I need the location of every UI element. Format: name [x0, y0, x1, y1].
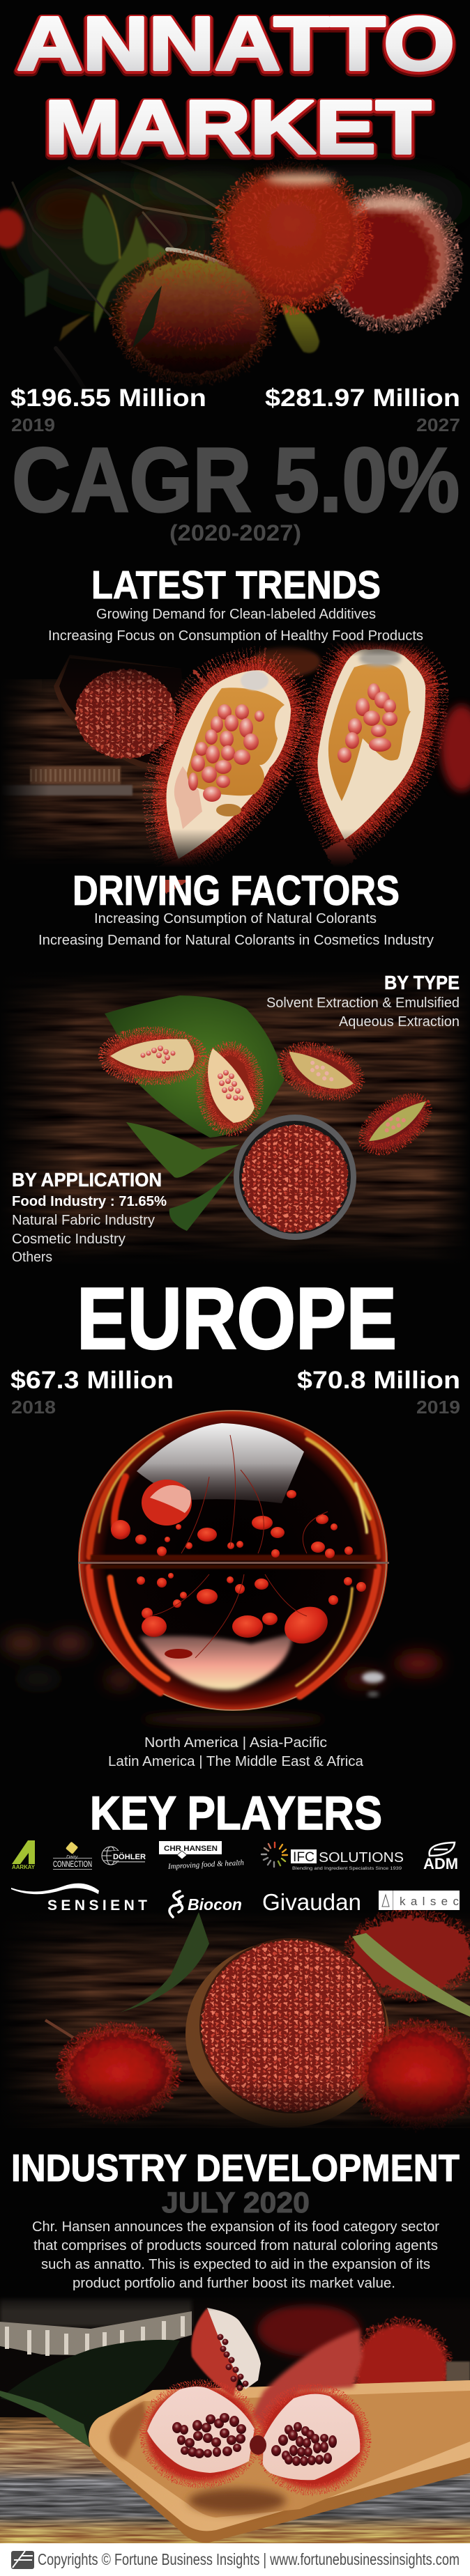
heading: driving factors: DRIVING FACTORS	[73, 867, 400, 914]
heading: latest trends: LATEST TRENDS	[91, 563, 381, 607]
photo: opened annatto pods	[0, 620, 470, 880]
pod c	[278, 1039, 364, 1103]
text: development description: Chr. Hansen announces the expansion of its food category sector	[32, 2219, 439, 2235]
large green leaf	[105, 995, 285, 1138]
europe stats: $70.8 Million	[297, 1367, 460, 1394]
dark backdrop	[0, 2297, 470, 2423]
pod left spikes	[167, 670, 291, 859]
europe stats: 2019	[416, 1397, 460, 1418]
pod right open	[259, 2389, 365, 2490]
logo: biocon	[169, 1891, 242, 1917]
text: by application: Others	[12, 1250, 52, 1265]
pod left	[167, 670, 291, 859]
branches	[13, 162, 227, 390]
seeds	[338, 683, 397, 763]
text: by application: Natural Fabric Industry	[12, 1213, 155, 1228]
lower glow	[139, 1634, 293, 1690]
logo: chr hansen: CHR HANSEN	[164, 1845, 218, 1853]
right fruit	[360, 2026, 470, 2123]
red fruit at right edge	[441, 705, 470, 791]
logo: ifc solutions: SOLUTIONS	[319, 1850, 404, 1865]
title line: annatto: ANNATTO	[17, 2, 455, 87]
logo: dohler: DÖHLER	[113, 1852, 146, 1861]
reflection on surface	[142, 1713, 324, 1725]
green stem	[352, 1933, 470, 2017]
stem center	[250, 2435, 266, 2455]
left fruit	[45, 2020, 174, 2116]
logo: aarkay	[12, 1840, 36, 1870]
glass ring highlights	[89, 1434, 378, 1696]
europe stats: $67.3 Million	[10, 1367, 174, 1394]
pod right	[317, 649, 425, 839]
wooden background	[0, 1912, 470, 2128]
bowl of seeds	[42, 644, 321, 773]
text: development description	[32, 2219, 439, 2291]
logo: kalsec: kalsec	[400, 1895, 459, 1908]
logo: adm	[423, 1842, 458, 1872]
icon: fortune business insights logo	[11, 2551, 34, 2569]
text: driving factors list: Increasing Consumption of Natural Colorants	[94, 911, 377, 926]
logo: dairy connection: CONNECTION	[53, 1859, 92, 1869]
footer	[0, 2543, 470, 2576]
title line: annatto: ANNATTO	[17, 1, 455, 86]
fade bottom	[0, 2079, 470, 2139]
logo: ifc solutions: IFC	[293, 1850, 314, 1865]
text: development description: product portfolio and further boost its market value.	[73, 2276, 395, 2291]
seeds in bowl	[202, 1940, 384, 2111]
stat: 2027 value: $281.97 Million	[265, 385, 460, 412]
photo: pods on leaves with bowl of seeds	[0, 972, 470, 1264]
pod b	[204, 1048, 257, 1129]
logos: key players	[11, 1840, 460, 1917]
pod d	[356, 1087, 438, 1161]
text: development description: such as annatto. This is expected to aid in the expansion of its	[41, 2257, 430, 2272]
fade top and bottom	[0, 620, 470, 641]
europe stats	[10, 1367, 460, 1418]
top right fruit	[349, 1914, 470, 1994]
seeds	[218, 2334, 248, 2391]
wooden bowl	[185, 1941, 389, 2127]
text: development description: that comprises of products sourced from natural coloring agents	[33, 2238, 438, 2253]
leaves	[24, 192, 319, 353]
text: other regions: Latin America | The Middle East & Africa	[108, 1754, 364, 1769]
woven basket	[0, 2299, 192, 2356]
heading: europe: EUROPE	[77, 1271, 397, 1367]
europe stats: 2018	[11, 1397, 56, 1418]
title line: annatto: ANNATTO	[17, 3, 455, 88]
seeds	[188, 704, 264, 802]
cagr period: (2020-2027)	[169, 520, 301, 545]
text: latest trends list	[48, 607, 423, 644]
text: driving factors list	[38, 911, 434, 948]
wooden table	[0, 669, 195, 864]
text: other regions	[108, 1735, 364, 1769]
dark leaf	[0, 2340, 180, 2447]
red flap behind	[252, 2329, 363, 2429]
text: by type: Aqueous Extraction	[339, 1014, 460, 1030]
photo: seed bowl and fruits	[0, 1912, 470, 2152]
center divider	[78, 1562, 389, 1564]
logo: dairy connection	[53, 1842, 92, 1870]
weathered table	[0, 2417, 470, 2543]
pod left open	[145, 2385, 257, 2483]
red bubbles	[111, 1490, 366, 1650]
photo: opened pods on wooden tray	[0, 2292, 470, 2543]
illustration: red glass sphere	[3, 1410, 441, 1725]
logo: dairy connection: Dairy	[66, 1855, 78, 1860]
wooden background	[0, 972, 470, 1264]
logo: adm: ADM	[423, 1855, 458, 1872]
pod a	[105, 1034, 200, 1078]
logo: givaudan: Givaudan	[262, 1889, 361, 1915]
logo: biocon: Biocon	[188, 1895, 242, 1914]
sphere body	[78, 1410, 388, 1711]
title line: market: MARKET	[45, 85, 431, 170]
top dome highlight	[137, 1423, 304, 1503]
fruit: right	[326, 195, 455, 323]
logo: chr hansen	[159, 1841, 245, 1871]
logo: ifc solutions: Blending and Ingredient Specialists Since 1939	[292, 1866, 402, 1871]
title line: market: MARKET	[45, 86, 431, 171]
text: by application	[12, 1169, 167, 1265]
logo: ifc solutions	[261, 1842, 404, 1871]
photo: annatto fruit on branch	[0, 159, 470, 421]
text: other regions: North America | Asia-Pacific	[144, 1735, 327, 1751]
logo: sensient	[11, 1884, 147, 1914]
bowl of seeds	[234, 1115, 356, 1240]
background bokeh lights	[3, 1632, 441, 1686]
logo: sensient: SENSIENT	[47, 1898, 147, 1914]
pod right spikes	[317, 649, 425, 839]
text: by type: Solvent Extraction & Emulsified	[266, 995, 460, 1011]
text: driving factors list: Increasing Demand for Natural Colorants in Cosmetics Industry	[38, 933, 434, 948]
thin veins	[150, 1435, 328, 1658]
text: by type	[266, 972, 460, 1030]
text: by application: Cosmetic Industry	[12, 1232, 126, 1247]
logo: chr hansen: Improving food & health	[167, 1859, 245, 1871]
heading: key players: KEY PLAYERS	[90, 1787, 382, 1840]
text: latest trends list: Increasing Focus on Consumption of Healthy Food Products	[48, 628, 423, 644]
wooden tray	[89, 2361, 470, 2543]
text: by type: BY TYPE	[384, 972, 460, 993]
logo: kalsec	[379, 1891, 460, 1910]
text: latest trends list: Growing Demand for Clean-labeled Additives	[96, 607, 376, 622]
large bubble	[142, 1480, 192, 1526]
text: by application: BY APPLICATION	[12, 1169, 162, 1190]
fruit: lower left	[118, 256, 268, 378]
seeds	[271, 2422, 337, 2466]
text: by application: Food Industry : 71.65%	[12, 1194, 167, 1209]
market value stats	[10, 385, 460, 545]
fruit: large center	[220, 169, 363, 305]
upper pod	[191, 2308, 261, 2396]
stat: 2019 value: $196.55 Million	[10, 385, 206, 412]
seeds	[172, 2413, 246, 2458]
date: july 2020: JULY 2020	[162, 2186, 310, 2219]
title	[17, 1, 455, 172]
small leaves	[126, 1122, 240, 1231]
stat: 2019 year: 2019	[11, 414, 55, 435]
fade edges	[0, 320, 470, 408]
blurred fruit behind	[257, 2304, 449, 2417]
dark leaf	[120, 1912, 209, 2012]
title line: market: MARKET	[45, 87, 431, 172]
stat: 2027 year: 2027	[416, 414, 460, 435]
fade top	[0, 2292, 470, 2311]
logo: dohler	[102, 1847, 146, 1865]
logo: aarkay: AARKAY	[12, 1864, 36, 1870]
